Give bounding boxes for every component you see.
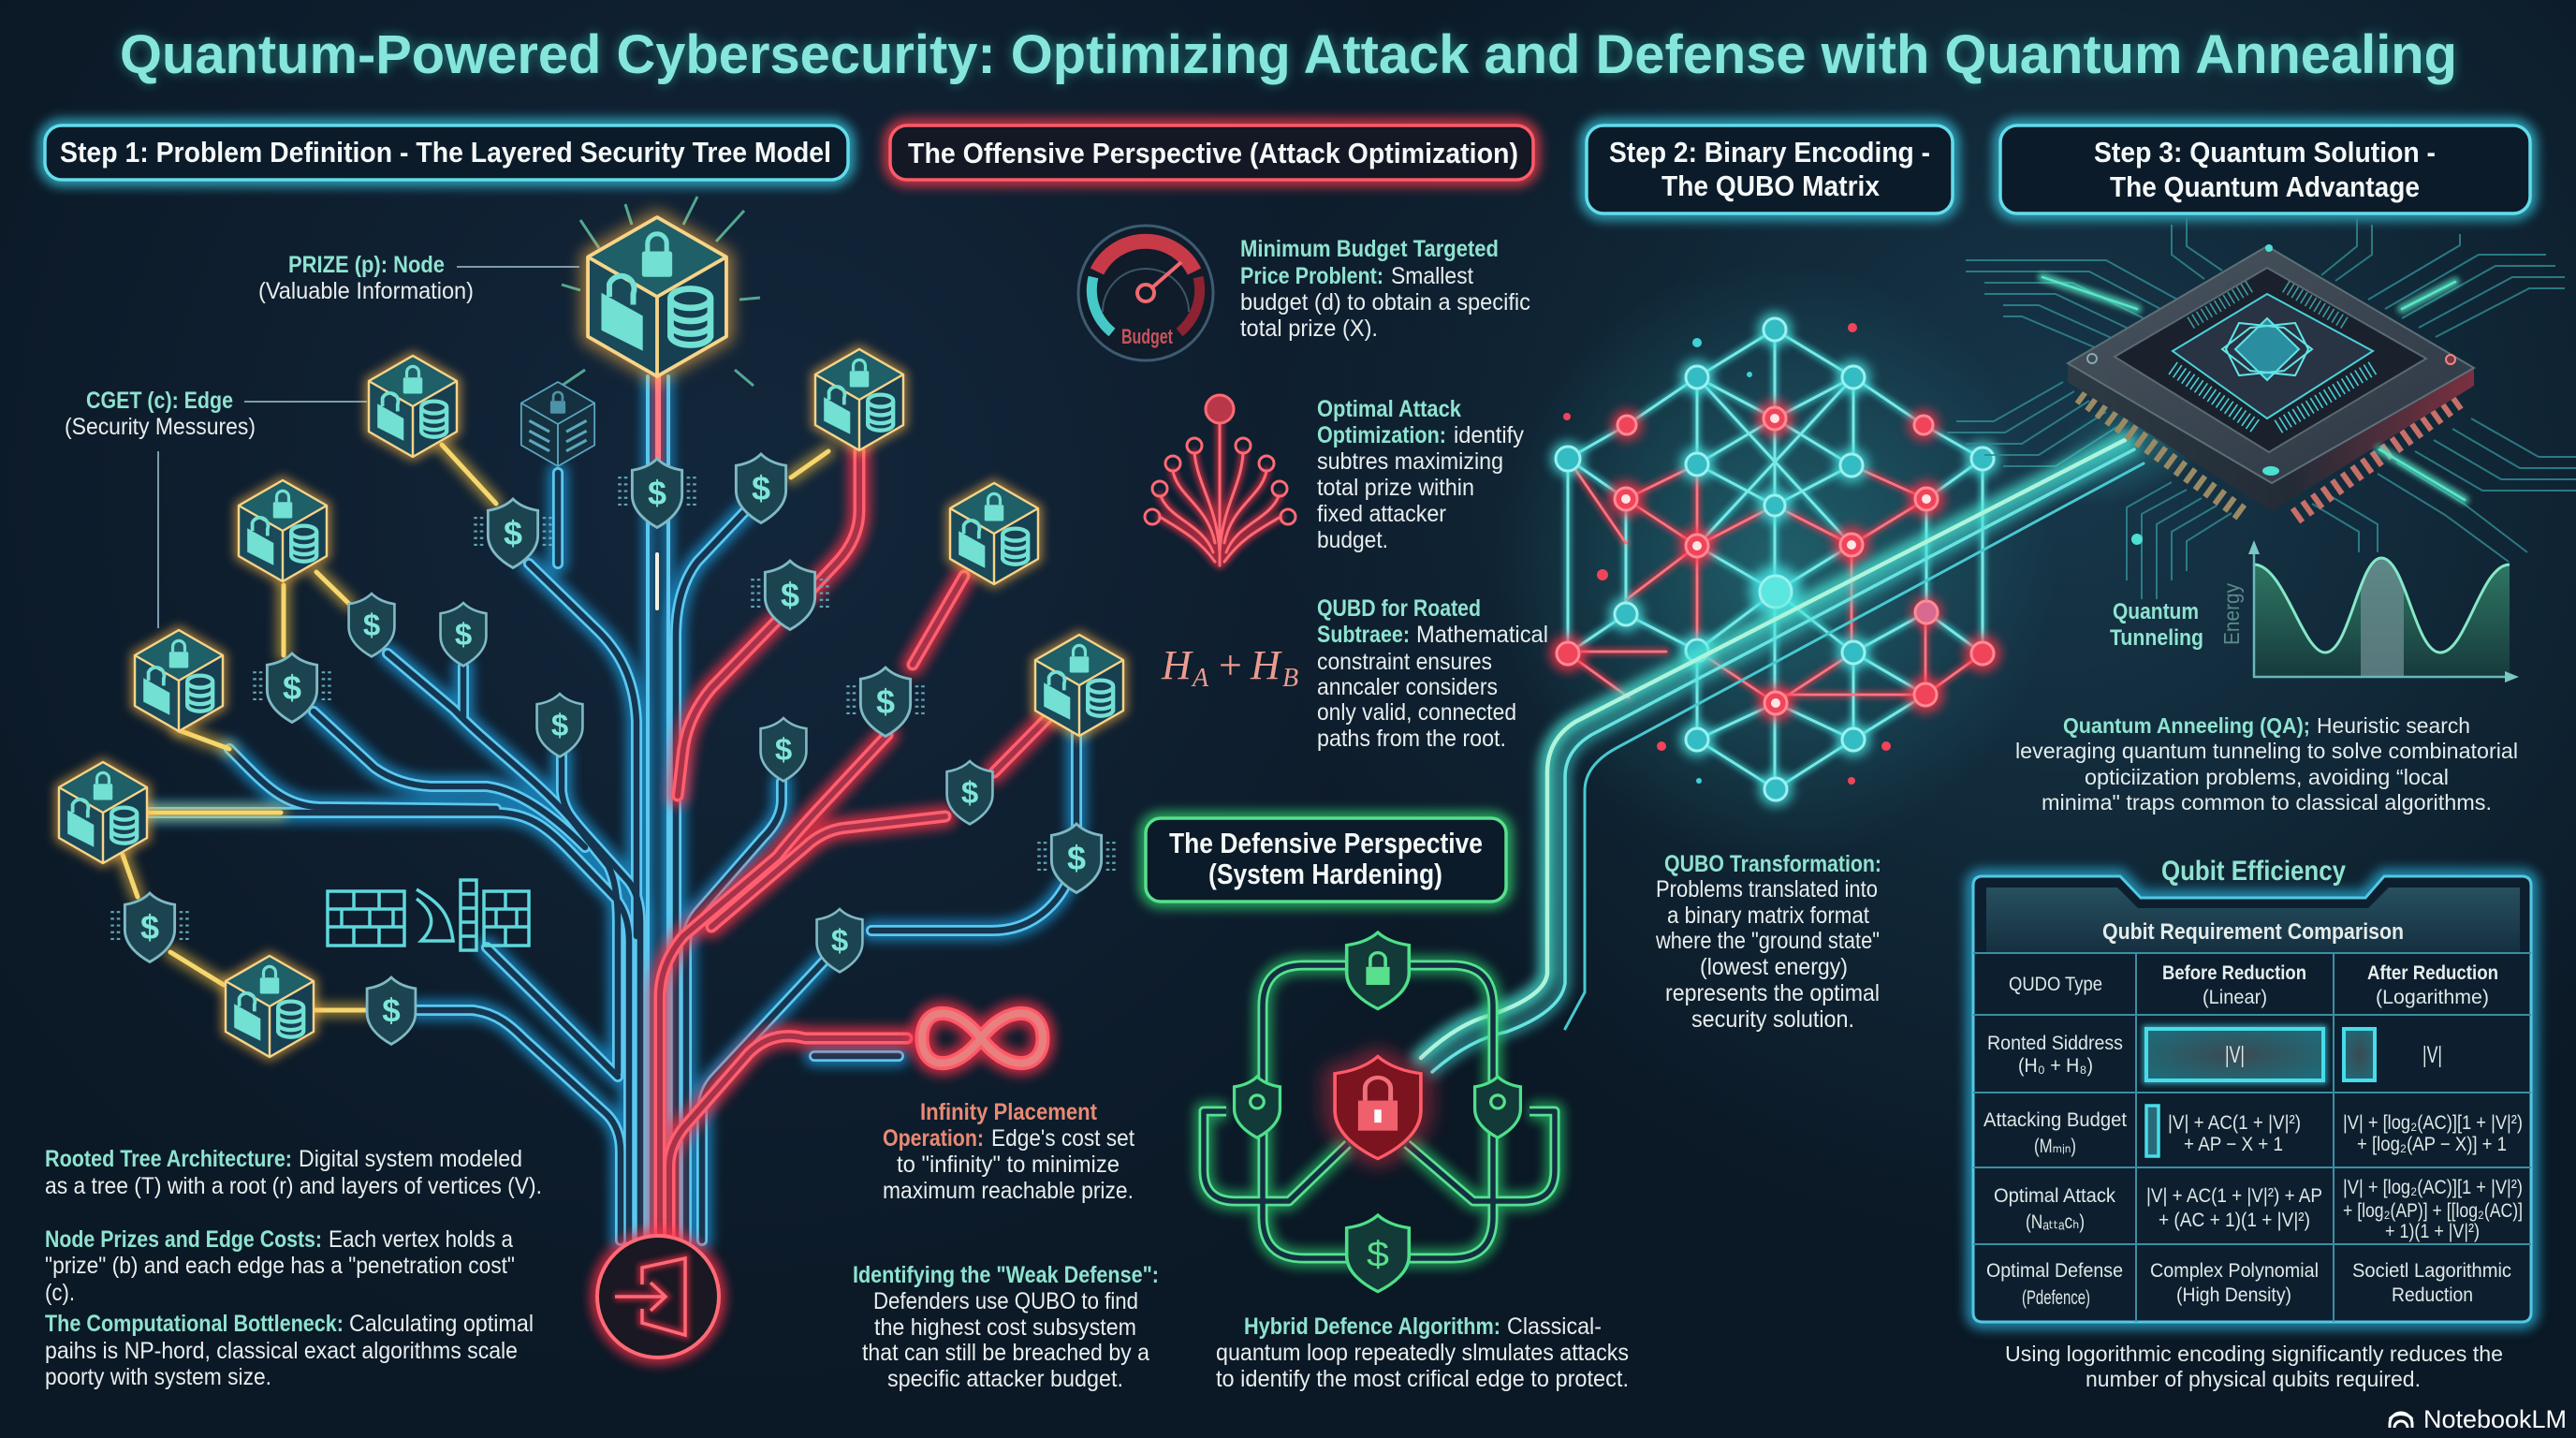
heading: defensive perspective	[1146, 818, 1506, 902]
text: minimum budget targeted prize: total prize (X).	[1240, 315, 1378, 342]
text: minimum budget targeted prize	[1240, 236, 1530, 342]
chip die	[2173, 286, 2373, 428]
text: qubo transformation: QUBO Transformation:	[1664, 851, 1881, 877]
text: infinity placement operation: maximum reachable prize.	[883, 1178, 1134, 1204]
label: quantum tunneling: Tunneling	[2110, 625, 2203, 651]
text: computational bottleneck: Calculating optimal	[349, 1311, 534, 1337]
shields: side guards	[1235, 1077, 1520, 1137]
blue tree branches	[150, 376, 1076, 1240]
text: infinity placement operation: Edge's cost set	[991, 1125, 1134, 1152]
heading: step 1	[45, 125, 848, 180]
table header row: (Logarithme)	[2376, 987, 2489, 1008]
text: infinity placement operation: to "infinity" to minimize	[897, 1152, 1120, 1178]
row: optimal defense: (Pdefence)	[2022, 1287, 2090, 1309]
panel: qubit efficiency table	[1973, 856, 2531, 1322]
text: infinity placement operation: Operation:	[883, 1125, 984, 1152]
text: qubo transformation: where the "ground state"	[1655, 928, 1880, 954]
row: optimal defense: Reduction	[2392, 1284, 2473, 1306]
text: optimal attack optimization: Optimization:	[1317, 422, 1446, 448]
formula: HA + HB: A	[1191, 664, 1209, 693]
text: quantum annealing: minima" traps common to classical algorithms.	[2042, 790, 2492, 814]
defense loop diagram	[1204, 932, 1555, 1292]
text: table caption: number of physical qubits required.	[2086, 1367, 2421, 1391]
row: optimal attack: |V| + AC(1 + |V|²) + AP	[2146, 1185, 2322, 1207]
green loop	[1204, 965, 1555, 1258]
icon: firewall	[328, 880, 529, 950]
text: rooted tree architecture: Digital system modeled	[299, 1146, 522, 1172]
text: rooted tree architecture: Rooted Tree Architecture:	[45, 1146, 292, 1172]
table title: Qubit Efficiency	[2161, 856, 2346, 887]
heading: step 2: Step 2: Binary Encoding -	[1609, 136, 1930, 169]
shield cost markers: $	[363, 608, 380, 642]
formula: HA + HB: H	[1250, 642, 1282, 688]
text: identifying the weak defense: Identifying the "Weak Defense":	[853, 1262, 1159, 1288]
label: prize node: (Valuable Information)	[258, 278, 474, 304]
heading: step 2: The QUBO Matrix	[1661, 169, 1881, 202]
text: optimal attack optimization: total prize within	[1317, 475, 1474, 501]
row: rooted subtree: (H₀ + H₈)	[2018, 1055, 2093, 1077]
chart: energy landscape: Energy	[2219, 583, 2244, 645]
row: optimal attack: Optimal Attack	[1994, 1185, 2115, 1207]
table frame	[1973, 876, 2531, 1322]
heading: step 2	[1587, 125, 1953, 213]
text: table caption: Using logorithmic encoding significantly reduces the	[2005, 1342, 2503, 1366]
icon: root entry circle	[597, 1236, 719, 1357]
text: node prizes and edge costs: "prize" (b) and each edge has a "penetration cost"	[45, 1253, 515, 1279]
formula: HA + HB: H	[1161, 642, 1193, 688]
title: Quantum-Powered Cybersecurity: Optimizing Attack and Defense with Quantum Annealing	[120, 24, 2457, 85]
row: optimal attack: + (AC + 1)(1 + |V|²)	[2159, 1210, 2310, 1231]
text: minimum budget targeted prize: Price Problent:	[1240, 263, 1383, 289]
row: optimal defense: Complex Polynomial	[2150, 1260, 2319, 1282]
text: qubo transformation: a binary matrix format	[1667, 902, 1869, 929]
row: optimal defense: Optimal Defense	[1986, 1260, 2123, 1282]
text: node prizes and edge costs: Each vertex holds a	[329, 1226, 513, 1253]
table header row: (Linear)	[2203, 987, 2267, 1008]
formula: HA + HB: +	[1219, 642, 1242, 688]
text: qubo transformation: Problems translated into	[1656, 876, 1878, 902]
text: minimum budget targeted prize: Smallest	[1391, 263, 1473, 289]
shield cost markers: $	[648, 474, 666, 512]
text: optimal attack optimization	[1317, 396, 1524, 553]
text: quantum annealing	[2015, 713, 2518, 814]
row: rooted subtree	[1987, 1029, 2442, 1080]
text: computational bottleneck: The Computational Bottleneck:	[45, 1311, 344, 1337]
row: optimal defense: (High Density)	[2176, 1284, 2291, 1306]
text: infinity placement operation: Infinity Placement	[920, 1099, 1098, 1125]
text: quantum annealing: Heuristic search	[2317, 713, 2470, 738]
label: cost edge: (Security Messures)	[65, 414, 256, 440]
text: rooted tree architecture: as a tree (T) with a root (r) and layers of vertices (V).	[45, 1173, 542, 1199]
label: quantum tunneling: Quantum	[2113, 599, 2199, 624]
chip highlights	[2087, 244, 2455, 545]
text: identifying the weak defense: specific attacker budget.	[887, 1366, 1123, 1392]
cube nodes	[59, 217, 1123, 1057]
icon: budget gauge: Budget	[1121, 325, 1173, 348]
chip inner recess	[2115, 268, 2426, 452]
row: attacking budget: + AP − X + 1	[2184, 1134, 2283, 1155]
text: table caption	[2005, 1342, 2503, 1391]
text: hybrid defence algorithm: Hybrid Defence Algorithm:	[1244, 1313, 1500, 1340]
text: qubo for rooted subtree: constraint ensures	[1317, 649, 1492, 675]
cyan qubit nodes	[1551, 313, 1999, 806]
text: computational bottleneck: paihs is NP-hord, classical exact algorithms scale	[45, 1338, 518, 1364]
heading: defensive perspective: The Defensive Perspective	[1169, 827, 1483, 859]
row: optimal attack	[1994, 1177, 2523, 1242]
shield cost markers: $	[831, 923, 848, 958]
text: node prizes and edge costs	[45, 1226, 515, 1306]
shield cost markers	[110, 454, 1117, 1044]
text: hybrid defence algorithm: Classical-	[1507, 1313, 1602, 1340]
formula: HA + HB	[1161, 642, 1298, 693]
text: quantum annealing: opticiization problems, avoiding “local	[2085, 765, 2449, 789]
heading: offensive perspective: The Offensive Perspective (Attack Optimization)	[908, 137, 1518, 169]
text: optimal attack optimization: Optimal Attack	[1317, 396, 1461, 422]
heading: step 3: The Quantum Advantage	[2110, 170, 2420, 203]
text: quantum annealing: Quantum Anneeling (QA);	[2063, 713, 2310, 738]
chart: energy landscape	[2219, 540, 2519, 682]
text: minimum budget targeted prize: Minimum Budget Targeted	[1240, 236, 1499, 262]
shield cost markers: $	[1067, 839, 1086, 877]
shield: top lock	[1347, 932, 1409, 1009]
row: attacking budget: (Mₘᵢₙ)	[2034, 1136, 2076, 1157]
text: optimal attack optimization: budget.	[1317, 527, 1388, 553]
text: qubo for rooted subtree: QUBD for Roated	[1317, 595, 1481, 622]
text: infinity placement operation	[883, 1099, 1134, 1204]
icon: quantum chip	[2042, 244, 2474, 545]
shield cost markers: $	[781, 576, 799, 614]
icon: attack subtree	[1145, 395, 1295, 565]
shield: central red lock	[1335, 1056, 1421, 1159]
table subtitle: Qubit Requirement Comparison	[2102, 919, 2404, 945]
shield cost markers: $	[961, 775, 978, 810]
text: minimum budget targeted prize: budget (d) to obtain a specific	[1240, 289, 1530, 315]
text: optimal attack optimization: subtres maximizing	[1317, 448, 1503, 475]
shield cost markers: $	[551, 708, 568, 742]
label: prize node	[258, 252, 474, 304]
text: node prizes and edge costs: (c).	[45, 1280, 75, 1306]
row: attacking budget	[1983, 1106, 2523, 1157]
shield cost markers: $	[504, 514, 522, 552]
shield cost markers: $	[752, 469, 770, 507]
formula: HA + HB: B	[1282, 664, 1298, 693]
logo: NotebookLM: NotebookLM	[2423, 1405, 2567, 1433]
text: optimal attack optimization: identify	[1454, 422, 1524, 448]
text: qubo transformation: (lowest energy)	[1700, 954, 1848, 980]
row: rooted subtree: |V|	[2422, 1042, 2442, 1068]
chip pins	[2080, 395, 2464, 517]
text: identifying the weak defense: that can still be breached by a	[862, 1340, 1149, 1366]
icon: infinity placement	[922, 1013, 1043, 1064]
table header row: Before Reduction	[2162, 962, 2306, 984]
matrix lattice	[1495, 262, 2056, 861]
label: quantum tunneling	[2110, 599, 2203, 651]
text: qubo for rooted subtree: only valid, connected	[1317, 699, 1516, 726]
text: qubo for rooted subtree: anncaler considers	[1317, 674, 1498, 700]
row: attacking budget: |V| + AC(1 + |V|²)	[2168, 1112, 2301, 1134]
chip light streaks	[2042, 277, 2465, 500]
row: optimal defense	[1986, 1260, 2511, 1309]
row: optimal attack: + [log₂(AP)] + [[log₂(AC)]	[2343, 1200, 2523, 1222]
text: computational bottleneck	[45, 1311, 534, 1390]
heading: offensive perspective	[890, 125, 1533, 180]
heading: defensive perspective: (System Hardening)	[1208, 858, 1442, 890]
table header row: After Reduction	[2367, 962, 2498, 984]
annotation lines	[158, 267, 579, 628]
security tree diagram	[59, 197, 1123, 1357]
text: qubo for rooted subtree: Mathematical	[1416, 622, 1548, 648]
text: hybrid defence algorithm: quantum loop repeatedly slmulates attacks	[1216, 1340, 1629, 1366]
chip trace lines	[1947, 218, 2576, 599]
text: qubo for rooted subtree: Subtraee:	[1317, 622, 1410, 648]
label: cost edge: CGET (c): Edge	[86, 388, 233, 414]
text: qubo for rooted subtree: paths from the root.	[1317, 726, 1506, 752]
text: identifying the weak defense	[853, 1262, 1159, 1392]
shield: bottom dollar: $	[1367, 1234, 1389, 1274]
text: identifying the weak defense: Defenders use QUBO to find	[873, 1288, 1138, 1314]
row: attacking budget: + [log₂(AP − X)] + 1	[2357, 1134, 2507, 1155]
chip body	[2068, 363, 2474, 511]
beam from chip to lattice and defense	[1421, 346, 2254, 1072]
yellow cube links	[123, 445, 828, 1010]
shield cost markers: $	[775, 732, 792, 767]
title: Quantum-Powered Cybersecurity: Optimizing Attack and Defense with Quantum Annealing	[120, 24, 2457, 85]
icon: budget gauge	[1078, 226, 1213, 360]
text: rooted tree architecture	[45, 1146, 542, 1199]
red qubit nodes	[1550, 323, 2000, 785]
text: hybrid defence algorithm	[1216, 1313, 1629, 1392]
top cube sparkle rays	[562, 197, 760, 386]
lattice glow haze	[1495, 262, 2056, 861]
label: cost edge	[65, 388, 256, 440]
text: qubo transformation: security solution.	[1691, 1006, 1854, 1033]
heading: step 3	[2000, 125, 2530, 213]
text: qubo for rooted subtree	[1317, 595, 1548, 752]
row: rooted subtree: Ronted Siddress	[1987, 1033, 2123, 1054]
lattice edges	[1568, 330, 1983, 789]
row: attacking budget: |V| + [log₂(AC)][1 + |V|²)	[2343, 1112, 2523, 1134]
heading: step 1: Step 1: Problem Definition - The Layered Security Tree Model	[60, 136, 831, 169]
shield cost markers: $	[876, 682, 895, 721]
row: optimal attack: (Nₐₜₜₐcₕ)	[2026, 1211, 2085, 1233]
text: optimal attack optimization: fixed attacker	[1317, 501, 1446, 527]
table header row: QUDO Type	[2009, 974, 2102, 995]
shield: bottom dollar	[1347, 1215, 1409, 1292]
text: computational bottleneck: poorty with system size.	[45, 1364, 271, 1390]
table header row	[2009, 962, 2498, 1008]
shield cost markers: $	[382, 993, 401, 1030]
label: prize node: PRIZE (p): Node	[288, 252, 445, 278]
text: qubo transformation: represents the optimal	[1665, 980, 1880, 1006]
shield cost markers: $	[455, 617, 472, 652]
text: qubo transformation	[1655, 851, 1881, 1033]
row: rooted subtree: |V|	[2225, 1042, 2245, 1068]
row: optimal attack: |V| + [log₂(AC)][1 + |V|²)	[2343, 1177, 2523, 1198]
text: node prizes and edge costs: Node Prizes and Edge Costs:	[45, 1226, 322, 1253]
text: quantum annealing: leveraging quantum tunneling to solve combinatorial	[2015, 739, 2518, 763]
text: hybrid defence algorithm: to identify the most crifical edge to protect.	[1216, 1366, 1629, 1392]
shield cost markers: $	[283, 668, 301, 707]
row: optimal defense: Societl Lagorithmic	[2352, 1260, 2511, 1282]
heading: step 3: Step 3: Quantum Solution -	[2094, 136, 2436, 169]
red attack paths	[657, 376, 1051, 1240]
row: optimal attack: + 1)(1 + |V|²)	[2385, 1221, 2480, 1242]
shield cost markers: $	[140, 908, 159, 946]
row: attacking budget: Attacking Budget	[1983, 1109, 2127, 1131]
text: identifying the weak defense: the highest cost subsystem	[874, 1314, 1136, 1341]
